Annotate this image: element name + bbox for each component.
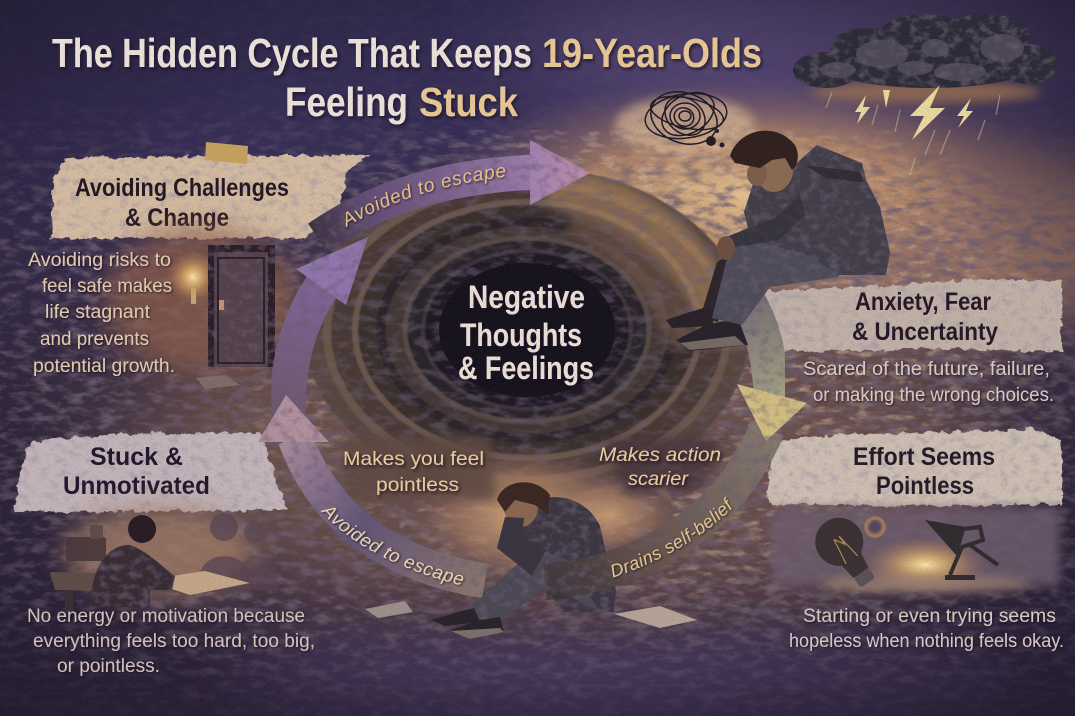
text: makes action scarier: scarier [628,468,690,490]
heading: Avoiding Challenges [75,174,289,202]
text: avoiding challenges description: life stagnant [45,302,151,323]
arm [497,517,546,576]
text: effort seems pointless description [789,606,1064,652]
text: anxiety description: Scared of the future, failure, [803,359,1050,380]
text: center vortex label: Negative [468,279,585,315]
text: avoiding challenges description: and prevents [40,329,149,350]
text: effort seems pointless description: Starting or even trying seems [803,606,1056,627]
text: center vortex label [458,279,594,386]
text: center vortex label: & Feelings [458,350,594,386]
arrow: left upward [288,237,368,435]
face [504,487,538,527]
heading: Pointless [876,472,974,500]
text: effort seems pointless description: hopeless when nothing feels okay. [789,631,1064,652]
icon: light bulb [806,508,888,597]
legs [470,548,600,622]
scene: closed door with wall lamp [105,228,295,389]
vortex of negative thoughts [310,173,748,494]
text: avoiding challenges description [28,250,175,377]
arrow: lower avoided to escape: Avoided to escape [320,508,466,587]
arrow: drains self-belief [544,422,784,600]
arrow: top avoided to escape: Avoided to escape [346,166,508,229]
heading: Effort Seems [853,443,995,471]
icon: desk lamp [925,520,998,580]
text: makes you feel pointless: pointless [376,474,459,496]
back leg [700,250,738,322]
scene: broken light bulb and desk lamp [772,508,1060,597]
heading: & Uncertainty [852,318,998,346]
warm ground patches around the lower figure [338,436,730,587]
hair [497,482,550,515]
tape [205,142,248,164]
text: avoiding challenges description: potential growth. [33,356,175,377]
text: avoiding challenges description: feel safe makes [42,276,172,297]
hair [730,131,798,170]
title: Feeling [285,79,408,125]
text: anxiety description [803,359,1054,406]
figure: teen sitting with head in hand [666,131,890,351]
text: makes you feel pointless: Makes you feel [343,448,484,470]
text: makes action scarier [599,444,721,490]
icon: tangled thought scribble [642,83,730,153]
text: makes you feel pointless [343,448,484,496]
hood shadow [805,165,864,182]
heading: & Change [125,204,229,232]
scene: storm cloud with lightning [793,14,1058,175]
arrow: drains self-belief: Drains self-belief [612,496,734,580]
title [52,30,762,125]
panel: effort seems pointless [768,427,1062,506]
shoes [431,608,480,626]
hand on head [747,162,767,186]
text: anxiety description: or making the wrong choices. [813,385,1054,406]
title: 19-Year-Olds [542,30,762,76]
heading: Unmotivated [63,472,210,500]
panel: anxiety fear and uncertainty [752,279,1062,352]
text: stuck and unmotivated description: No energy or motivation because [27,606,305,627]
hand on knee [717,236,735,260]
shoes [666,306,714,328]
hoodie body [724,145,890,275]
heading: Anxiety, Fear [855,288,991,316]
title: The Hidden Cycle That Keeps [52,30,532,76]
heading [853,443,995,500]
arrow: top avoided to escape [308,140,590,252]
title: Stuck [419,79,518,125]
face [755,148,793,192]
papers on the ground [365,601,697,628]
text: avoiding challenges description: Avoiding risks to [28,250,171,271]
arm fold [728,195,805,247]
text: stuck and unmotivated description: everything feels too hard, too big, [33,631,315,652]
scene: student slumped at desk [50,508,278,612]
arrow: right downward [735,280,807,441]
text: stuck and unmotivated description [27,606,315,677]
heading: Stuck & [90,443,183,471]
figure: teen sitting hugging knees [365,482,697,639]
hoodie body [508,497,616,612]
text: stuck and unmotivated description: or pointless. [57,656,160,677]
heading [75,174,289,232]
heading [63,443,210,500]
jeans [712,241,850,325]
panel: avoiding challenges and change [52,142,372,238]
arrow: lower avoided to escape [258,395,488,598]
text: makes action scarier: Makes action [599,444,721,466]
text: center vortex label: Thoughts [460,317,582,353]
heading [852,288,998,346]
panel: stuck and unmotivated [14,433,286,512]
